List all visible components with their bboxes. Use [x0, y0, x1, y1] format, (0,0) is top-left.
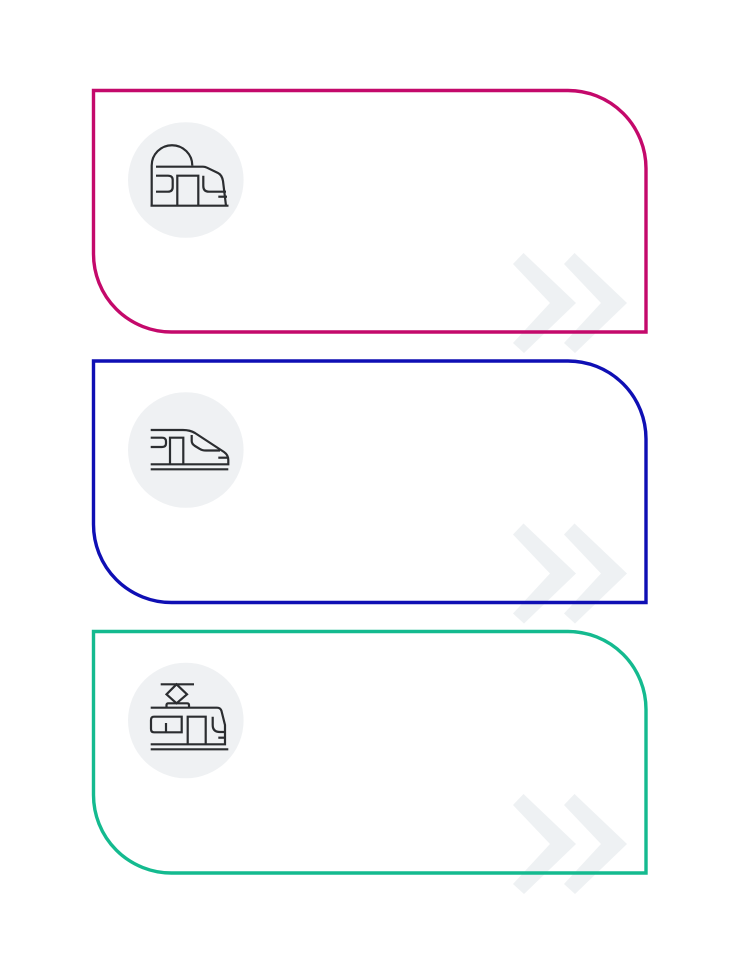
panel outline: green — [94, 632, 646, 873]
panel 1: metro train in crimson outline — [94, 90, 646, 353]
chevrons: panel 2 — [513, 524, 627, 624]
icon: high-speed train — [151, 430, 228, 469]
panel 3: tram in green outline — [94, 632, 646, 894]
panel 2: high-speed train in blue outline — [94, 361, 646, 624]
icon circle: panel 1 — [128, 122, 244, 238]
chevrons: panel 3 — [513, 794, 627, 894]
panel outline: blue — [94, 361, 646, 602]
chevrons: panel 1 — [513, 253, 627, 353]
icon circle: panel 3 — [128, 663, 244, 778]
panel outline: crimson — [94, 90, 646, 332]
icon: metro train in tunnel — [150, 145, 228, 206]
icon: tram with pantograph — [151, 684, 228, 749]
icon circle: panel 2 — [128, 392, 244, 508]
